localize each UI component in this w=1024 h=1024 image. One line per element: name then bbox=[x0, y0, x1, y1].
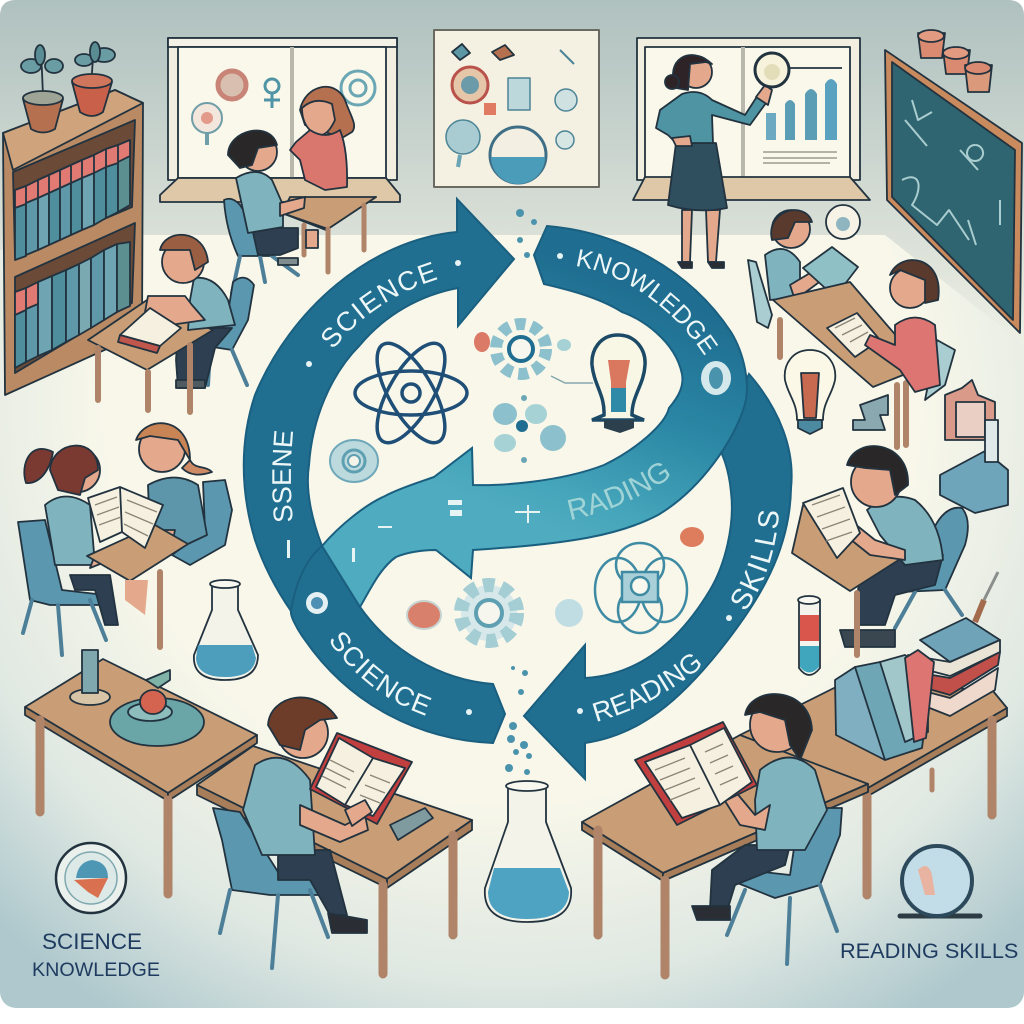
label: reading skills: READING SKILLS bbox=[840, 938, 1018, 963]
icon: left flask bbox=[194, 580, 258, 680]
icon: bulb in teacher's hand bbox=[755, 53, 789, 87]
icon: science knowledge badge bbox=[56, 843, 126, 913]
right bottom desk bbox=[582, 680, 1007, 975]
stack of books bbox=[835, 618, 1000, 760]
icon: gear and molecules bbox=[474, 324, 593, 463]
left upper desk with child bbox=[88, 235, 254, 412]
band labels: KNOWLEDGE bbox=[577, 249, 718, 356]
books upper row bbox=[15, 140, 130, 260]
poster bbox=[434, 30, 599, 187]
girl at window bbox=[290, 87, 354, 190]
window with chart bbox=[633, 38, 870, 200]
window with children bbox=[160, 38, 400, 202]
icon: vial and dish bbox=[70, 650, 204, 746]
label: science knowledge: SCIENCE bbox=[42, 929, 142, 954]
icon: bag and box at right bbox=[940, 380, 1008, 513]
icon: magnifier bbox=[900, 846, 980, 916]
icon: light bulb in centre bbox=[592, 335, 645, 433]
main cycle arrows bbox=[242, 196, 793, 782]
band labels bbox=[272, 249, 779, 722]
band labels: SCIENCE bbox=[330, 632, 432, 716]
icon: atom bbox=[355, 334, 467, 452]
band labels: READING bbox=[592, 654, 701, 722]
boy at window desk bbox=[224, 131, 376, 293]
right upper children at desk bbox=[748, 205, 955, 447]
boy reading right bbox=[792, 446, 968, 655]
boy reading bottom right bbox=[635, 694, 842, 964]
icon: pen bbox=[975, 572, 998, 622]
icon: small ring left bbox=[330, 440, 378, 482]
icon: test tube bbox=[798, 596, 820, 675]
two girls reading bbox=[18, 423, 232, 655]
bookshelf bbox=[3, 90, 143, 395]
label: science knowledge: KNOWLEDGE bbox=[32, 959, 160, 981]
icon: pots on board bbox=[918, 30, 992, 92]
icon: cloud molecule bbox=[595, 543, 687, 633]
boy reading bottom left bbox=[197, 697, 472, 974]
band labels: SCIENCE bbox=[322, 262, 438, 347]
teacher bbox=[656, 53, 789, 268]
icon: bottom gear group bbox=[407, 527, 704, 641]
droplets bbox=[505, 209, 537, 775]
books lower row bbox=[15, 242, 130, 368]
band dots and glints bbox=[287, 253, 732, 715]
icon: small circle badge bbox=[826, 205, 860, 239]
arrow: right band reading skills bbox=[524, 374, 792, 779]
band labels: RADING bbox=[568, 463, 670, 520]
band labels: SSENE bbox=[272, 431, 293, 522]
icon: bottom centre flask bbox=[485, 781, 571, 922]
label: science knowledge bbox=[32, 929, 160, 981]
arrow: S band knowledge to reading bbox=[322, 226, 747, 607]
arrow: left band science bbox=[244, 199, 514, 611]
arrow: bottom band science bbox=[291, 546, 505, 743]
window icons bbox=[192, 71, 375, 145]
bottom left desk bbox=[25, 650, 257, 894]
icon: plants on shelf bbox=[21, 42, 115, 132]
icon: right light bulb bbox=[785, 350, 835, 434]
chalkboard bbox=[885, 50, 1022, 333]
band labels: SKILLS bbox=[732, 510, 779, 609]
bar chart bbox=[763, 68, 842, 163]
